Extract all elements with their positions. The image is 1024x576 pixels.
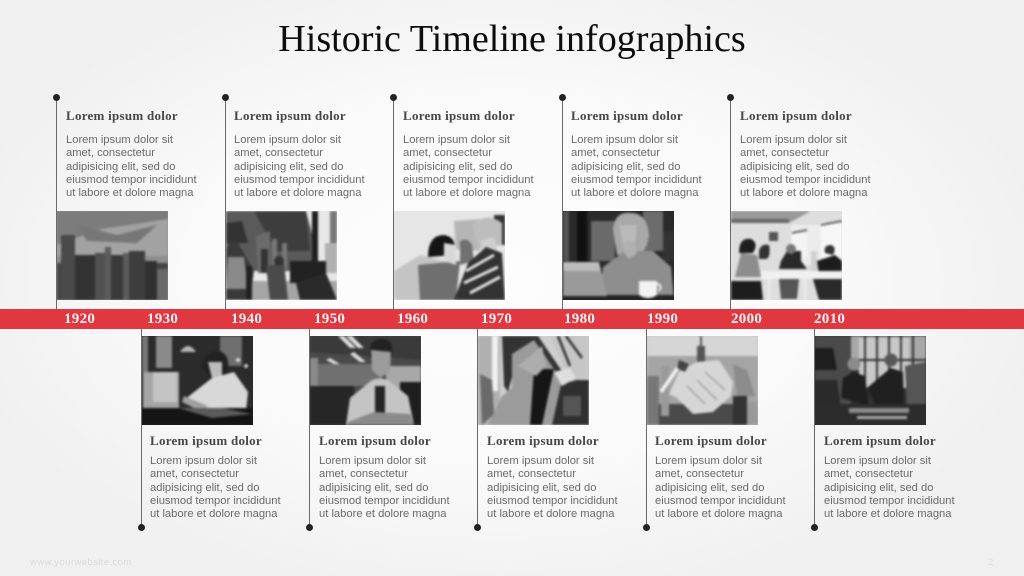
text block: amet, consectetur: [66, 147, 155, 159]
marker dot: [811, 524, 818, 531]
year 1950: 1950: [314, 311, 345, 327]
photo: handshake over city: [647, 336, 758, 425]
text block: amet, consectetur: [403, 147, 492, 159]
year 1970: 1970: [481, 311, 512, 327]
photo: city street: [226, 211, 337, 300]
text block: Lorem ipsum dolor sit: [319, 455, 426, 467]
connector line: [225, 97, 226, 309]
photo: man in office: [310, 336, 421, 425]
text block: ut labore et dolore magna: [319, 508, 446, 520]
timeline bar with years: [0, 309, 1024, 329]
photo: man at computer: [142, 336, 253, 425]
text block: Lorem ipsum dolor: [150, 433, 262, 448]
text block: [740, 108, 871, 199]
text block: amet, consectetur: [571, 147, 660, 159]
text block: [234, 108, 365, 199]
year 1980: 1980: [564, 311, 595, 327]
panel: 1920: [53, 94, 197, 309]
text block: Lorem ipsum dolor: [487, 433, 599, 448]
connector line: [730, 97, 731, 309]
text block: Lorem ipsum dolor sit: [234, 134, 341, 146]
text block: adipisicing elit, sed do: [234, 161, 343, 173]
text block: amet, consectetur: [234, 147, 323, 159]
text block: amet, consectetur: [740, 147, 829, 159]
footer website: www.yourwebsite.com: [30, 557, 132, 568]
text block: amet, consectetur: [150, 468, 239, 480]
year 2010: 2010: [814, 311, 845, 327]
text block: eiusmod tempor incididunt: [66, 174, 197, 186]
text block: Lorem ipsum dolor: [319, 433, 431, 448]
connector line: [646, 329, 647, 527]
text block: Lorem ipsum dolor sit: [655, 455, 762, 467]
text block: ut labore et dolore magna: [824, 508, 952, 520]
panel: 1970: [474, 329, 618, 531]
connector line: [56, 97, 57, 309]
text block: ut labore et dolore magna: [655, 508, 782, 520]
text block: [319, 433, 450, 520]
panel: 1950: [306, 329, 450, 531]
text block: amet, consectetur: [655, 468, 744, 480]
year 1990: 1990: [647, 311, 678, 327]
panel: 1980: [559, 94, 702, 309]
panel: 1930: [138, 329, 281, 531]
year 1930: 1930: [147, 311, 178, 327]
text block: [66, 108, 197, 199]
text block: eiusmod tempor incididunt: [403, 174, 534, 186]
marker dot: [727, 94, 734, 101]
page number: 2: [988, 557, 994, 568]
text block: eiusmod tempor incididunt: [824, 495, 955, 507]
text block: Lorem ipsum dolor: [571, 108, 683, 123]
connector line: [477, 329, 478, 527]
text block: eiusmod tempor incididunt: [571, 174, 702, 186]
text block: Lorem ipsum dolor: [403, 108, 515, 123]
photo: business handshake: [815, 336, 926, 425]
marker dot: [138, 524, 145, 531]
text block: amet, consectetur: [487, 468, 576, 480]
text block: Lorem ipsum dolor sit: [403, 134, 510, 146]
marker dot: [474, 524, 481, 531]
connector line: [393, 97, 394, 309]
text block: Lorem ipsum dolor: [655, 433, 767, 448]
marker dot: [306, 524, 313, 531]
photo: city skyline: [57, 211, 168, 300]
text block: ut labore et dolore magna: [150, 508, 278, 520]
text block: [655, 433, 786, 520]
connector line: [562, 97, 563, 309]
text block: Lorem ipsum dolor: [740, 108, 852, 123]
text block: ut labore et dolore magna: [487, 508, 614, 520]
text block: Lorem ipsum dolor sit: [824, 455, 931, 467]
text block: ut labore et dolore magna: [234, 187, 362, 199]
text block: [403, 108, 534, 199]
text block: adipisicing elit, sed do: [319, 482, 428, 494]
text block: adipisicing elit, sed do: [824, 482, 933, 494]
text block: eiusmod tempor incididunt: [150, 495, 281, 507]
text block: [571, 108, 702, 199]
text block: amet, consectetur: [319, 468, 408, 480]
text block: Lorem ipsum dolor: [234, 108, 346, 123]
text block: Lorem ipsum dolor: [824, 433, 936, 448]
panel: 2010: [811, 329, 955, 531]
marker dot: [53, 94, 60, 101]
text block: ut labore et dolore magna: [740, 187, 868, 199]
text block: [824, 433, 955, 520]
year 1940: 1940: [231, 311, 262, 327]
text block: amet, consectetur: [824, 468, 913, 480]
connector line: [309, 329, 310, 527]
year 1960: 1960: [397, 311, 428, 327]
text block: Lorem ipsum dolor sit: [740, 134, 847, 146]
marker dot: [643, 524, 650, 531]
panel: 1940: [222, 94, 365, 309]
text block: ut labore et dolore magna: [66, 187, 194, 199]
year 2000: 2000: [731, 311, 762, 327]
marker dot: [222, 94, 229, 101]
photo: group of people: [394, 211, 505, 300]
text block: ut labore et dolore magna: [403, 187, 530, 199]
marker dot: [559, 94, 566, 101]
text block: Lorem ipsum dolor: [66, 108, 178, 123]
year 1920: 1920: [64, 311, 95, 327]
photo: woman from behind: [478, 336, 589, 425]
text block: eiusmod tempor incididunt: [319, 495, 450, 507]
connector line: [141, 329, 142, 527]
text block: Lorem ipsum dolor sit: [150, 455, 257, 467]
text block: adipisicing elit, sed do: [403, 161, 512, 173]
photo: woman with laptop: [563, 211, 674, 300]
text block: Lorem ipsum dolor sit: [571, 134, 678, 146]
text block: eiusmod tempor incididunt: [487, 495, 618, 507]
text block: adipisicing elit, sed do: [571, 161, 680, 173]
text block: [487, 433, 618, 520]
text block: [150, 433, 281, 520]
text block: Lorem ipsum dolor sit: [66, 134, 173, 146]
title: Historic Timeline infographics: [278, 18, 746, 60]
text block: adipisicing elit, sed do: [655, 482, 764, 494]
panel: 1960: [390, 94, 534, 309]
connector line: [814, 329, 815, 527]
text block: eiusmod tempor incididunt: [655, 495, 786, 507]
photo: office meeting: [731, 211, 842, 300]
panel: 1990: [643, 329, 786, 531]
text block: Lorem ipsum dolor sit: [487, 455, 594, 467]
text block: adipisicing elit, sed do: [150, 482, 259, 494]
text block: eiusmod tempor incididunt: [740, 174, 871, 186]
marker dot: [390, 94, 397, 101]
text block: eiusmod tempor incididunt: [234, 174, 365, 186]
text block: adipisicing elit, sed do: [487, 482, 596, 494]
panel: 2000: [727, 94, 871, 309]
text block: adipisicing elit, sed do: [740, 161, 849, 173]
text block: ut labore et dolore magna: [571, 187, 698, 199]
text block: adipisicing elit, sed do: [66, 161, 175, 173]
